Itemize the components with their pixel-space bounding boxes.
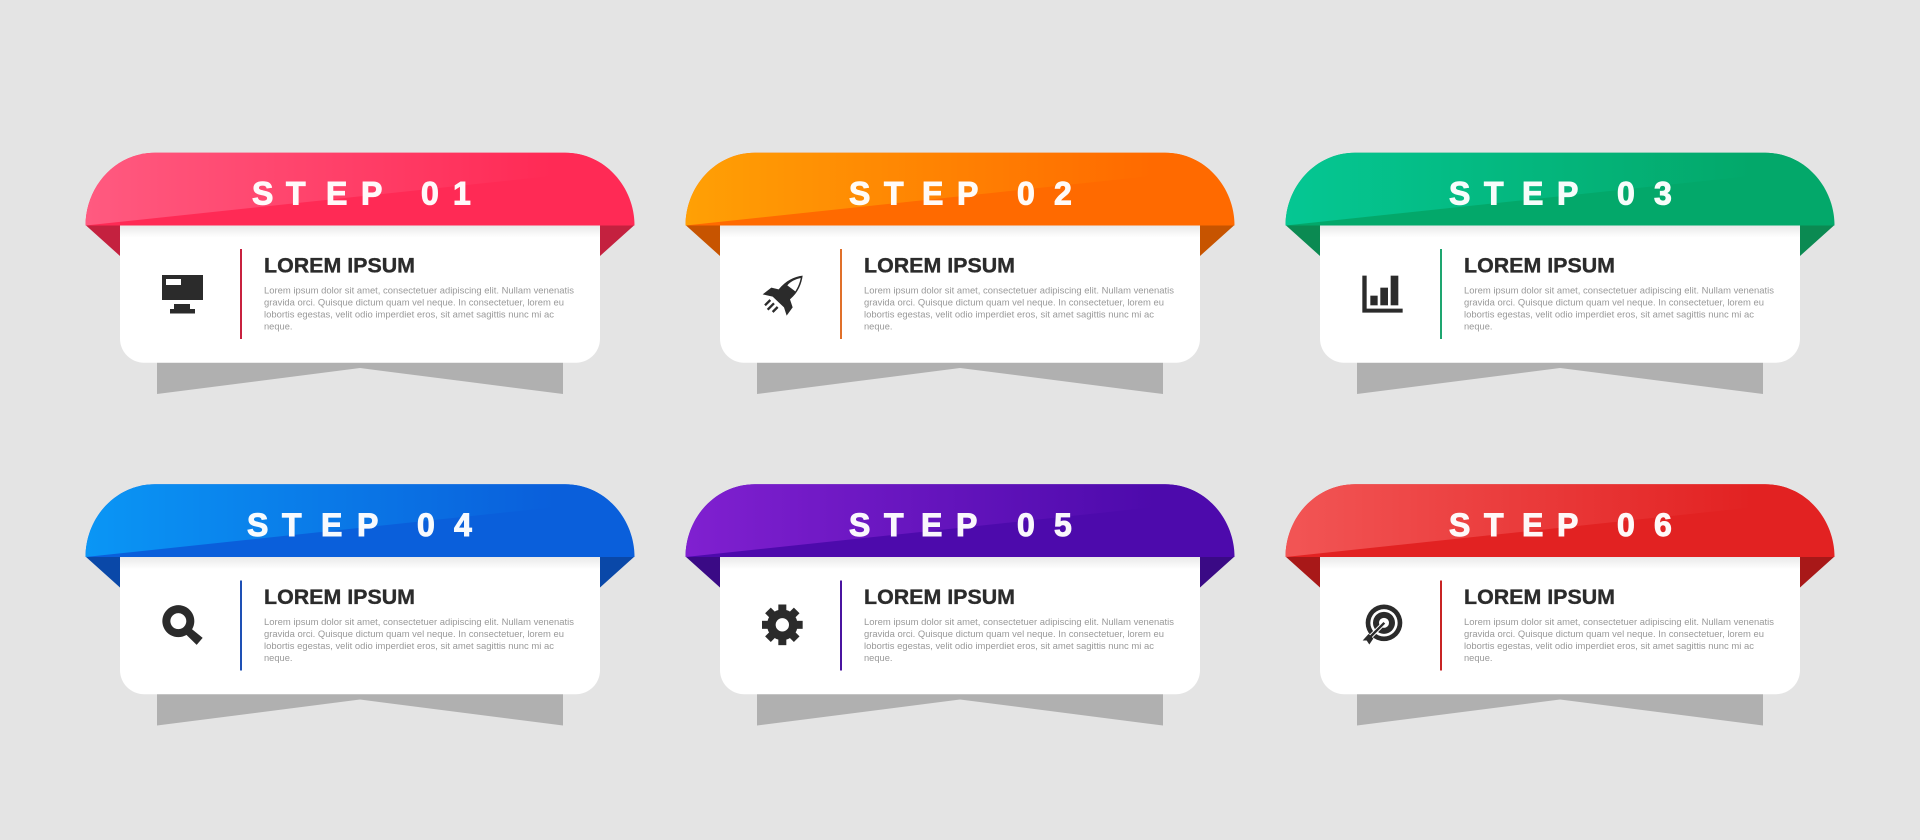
body text: neque. bbox=[864, 653, 892, 664]
panel: step 06 bbox=[1285, 484, 1836, 726]
grey shadow ribbon bbox=[157, 362, 563, 394]
heading: LOREM IPSUM bbox=[264, 586, 415, 609]
body text: gravida orci. Quisque dictum quam vel neque. In consectetuer, lorem eu bbox=[264, 629, 564, 640]
panel: step 03 bbox=[1285, 152, 1836, 394]
heading: LOREM IPSUM bbox=[864, 255, 1015, 278]
white card bbox=[1320, 557, 1800, 694]
heading: LOREM IPSUM bbox=[1464, 586, 1615, 609]
body text: neque. bbox=[864, 321, 892, 332]
body text: neque. bbox=[264, 653, 292, 664]
icon: monitor bbox=[162, 275, 203, 314]
divider line bbox=[240, 580, 242, 670]
body text: lobortis egestas, velit odio imperdiet eros, sit amet sagittis nunc mi ac bbox=[264, 641, 554, 652]
body text: Lorem ipsum dolor sit amet, consectetuer adipiscing elit. Nullam venenatis bbox=[264, 285, 574, 296]
ribbon folds bbox=[1286, 556, 1834, 588]
divider line bbox=[1440, 580, 1442, 670]
white card bbox=[120, 557, 600, 694]
body text: gravida orci. Quisque dictum quam vel neque. In consectetuer, lorem eu bbox=[1464, 629, 1764, 640]
ribbon folds bbox=[86, 225, 634, 256]
white card bbox=[720, 226, 1200, 363]
card top shade bbox=[1320, 226, 1800, 238]
body text: gravida orci. Quisque dictum quam vel neque. In consectetuer, lorem eu bbox=[264, 297, 564, 308]
body text: lobortis egestas, velit odio imperdiet eros, sit amet sagittis nunc mi ac bbox=[1464, 641, 1754, 652]
body text: Lorem ipsum dolor sit amet, consectetuer adipiscing elit. Nullam venenatis bbox=[264, 617, 574, 628]
body text bbox=[864, 617, 1174, 664]
white card bbox=[720, 557, 1200, 694]
body text: lobortis egestas, velit odio imperdiet eros, sit amet sagittis nunc mi ac bbox=[864, 641, 1154, 652]
divider line bbox=[840, 580, 842, 670]
ribbon folds bbox=[86, 556, 634, 588]
grey shadow ribbon bbox=[157, 694, 563, 726]
step title: STEP 05 bbox=[849, 507, 1072, 543]
body text: Lorem ipsum dolor sit amet, consectetuer adipiscing elit. Nullam venenatis bbox=[864, 617, 1174, 628]
ribbon folds bbox=[686, 556, 1234, 588]
body text: Lorem ipsum dolor sit amet, consectetuer adipiscing elit. Nullam venenatis bbox=[1464, 285, 1774, 296]
grey shadow ribbon bbox=[757, 362, 1163, 394]
coloured header band bbox=[1285, 152, 1836, 226]
body text: gravida orci. Quisque dictum quam vel neque. In consectetuer, lorem eu bbox=[864, 297, 1164, 308]
body text: neque. bbox=[1464, 653, 1492, 664]
grey shadow ribbon bbox=[1357, 362, 1763, 394]
step title: STEP 06 bbox=[1449, 507, 1672, 543]
coloured header band bbox=[685, 484, 1236, 558]
card top shade bbox=[120, 557, 600, 569]
body text: gravida orci. Quisque dictum quam vel neque. In consectetuer, lorem eu bbox=[864, 629, 1164, 640]
white card bbox=[120, 226, 600, 363]
step title: STEP 04 bbox=[247, 507, 472, 543]
card top shade bbox=[720, 557, 1200, 569]
body text bbox=[264, 617, 574, 664]
divider line bbox=[240, 249, 242, 339]
body text: lobortis egestas, velit odio imperdiet eros, sit amet sagittis nunc mi ac bbox=[864, 309, 1154, 320]
body text: neque. bbox=[264, 321, 292, 332]
step title: STEP 01 bbox=[252, 176, 471, 212]
panel: step 05 bbox=[685, 484, 1236, 726]
white card bbox=[1320, 226, 1800, 363]
card top shade bbox=[720, 226, 1200, 238]
coloured header band bbox=[685, 152, 1236, 226]
icon: rocket bbox=[763, 276, 803, 316]
panel: step 01 bbox=[85, 152, 636, 394]
step title: STEP 03 bbox=[1449, 176, 1672, 212]
body text bbox=[1464, 617, 1774, 664]
heading: LOREM IPSUM bbox=[864, 586, 1015, 609]
heading: LOREM IPSUM bbox=[264, 255, 415, 278]
body text: Lorem ipsum dolor sit amet, consectetuer adipiscing elit. Nullam venenatis bbox=[864, 285, 1174, 296]
ribbon folds bbox=[1286, 225, 1834, 256]
divider line bbox=[1440, 249, 1442, 339]
body text: neque. bbox=[1464, 321, 1492, 332]
card top shade bbox=[1320, 557, 1800, 569]
coloured header band bbox=[1285, 484, 1836, 558]
panel: step 02 bbox=[685, 152, 1236, 394]
body text bbox=[864, 285, 1174, 332]
icon: magnifying glass bbox=[162, 605, 203, 645]
grey shadow ribbon bbox=[1357, 694, 1763, 726]
ribbon folds bbox=[686, 225, 1234, 256]
body text: lobortis egestas, velit odio imperdiet eros, sit amet sagittis nunc mi ac bbox=[264, 309, 554, 320]
coloured header band bbox=[85, 484, 636, 558]
body text: gravida orci. Quisque dictum quam vel neque. In consectetuer, lorem eu bbox=[1464, 297, 1764, 308]
step title: STEP 02 bbox=[849, 176, 1072, 212]
grey shadow ribbon bbox=[757, 694, 1163, 726]
body text: Lorem ipsum dolor sit amet, consectetuer adipiscing elit. Nullam venenatis bbox=[1464, 617, 1774, 628]
card top shade bbox=[120, 226, 600, 238]
body text: lobortis egestas, velit odio imperdiet eros, sit amet sagittis nunc mi ac bbox=[1464, 309, 1754, 320]
panel: step 04 bbox=[85, 484, 636, 726]
body text bbox=[264, 285, 574, 332]
heading: LOREM IPSUM bbox=[1464, 255, 1615, 278]
icon: gear bbox=[762, 604, 803, 645]
icon: target with arrow bbox=[1363, 604, 1402, 644]
icon: bar chart bbox=[1362, 276, 1403, 313]
divider line bbox=[840, 249, 842, 339]
coloured header band bbox=[85, 152, 636, 226]
body text bbox=[1464, 285, 1774, 332]
